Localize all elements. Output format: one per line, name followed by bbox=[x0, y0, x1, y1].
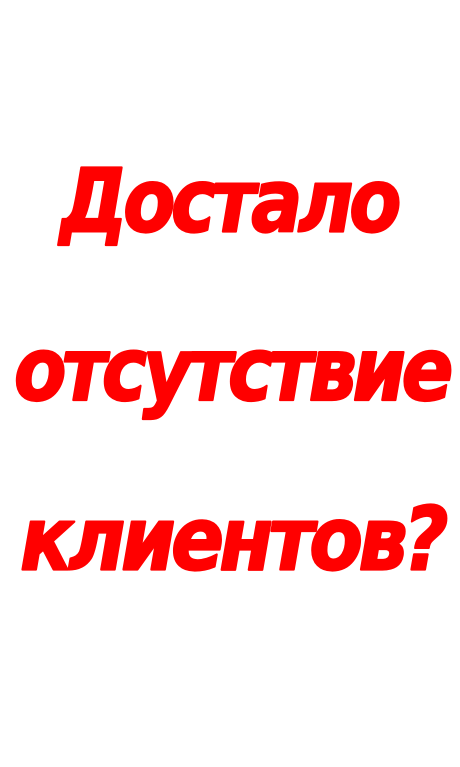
heading line: Достало: Достало bbox=[57, 150, 399, 252]
